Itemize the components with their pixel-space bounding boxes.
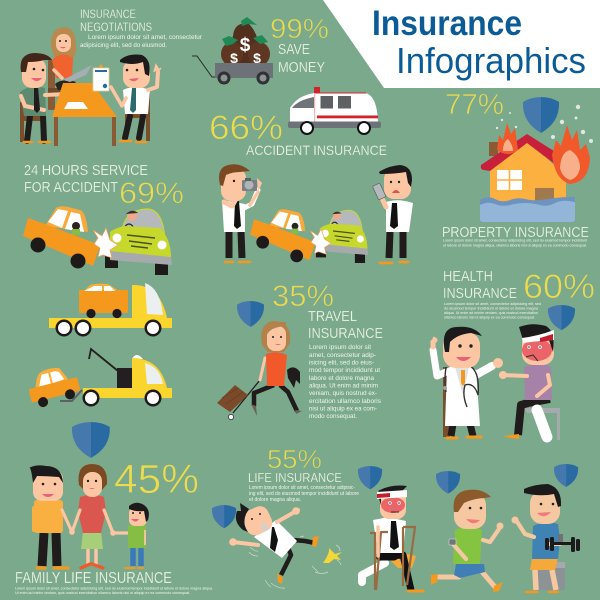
heading: insurance negotiations: Lorem ipsum dolor sit amet, consectetur — [88, 35, 202, 41]
illustration: family — [29, 464, 149, 568]
stat: 77%: 77% — [445, 89, 504, 121]
icon: shield travel — [237, 301, 264, 327]
stat: 66% accident insurance: ACCIDENT INSURANCE — [246, 142, 387, 158]
illustration: doctor — [433, 327, 503, 438]
illustration: man slipping on banana — [229, 503, 342, 588]
title banner: Insurance — [372, 4, 522, 43]
icon: money bags on cart: $ — [253, 50, 261, 66]
title banner: Infographics — [396, 40, 586, 81]
text block: travel lorem: ercitation ullamco laboris — [309, 398, 381, 405]
heading: health insurance 60%: Lorem ipsum dolor sit amet, consectetur adipisicing elit, sed — [444, 301, 541, 306]
illustration: flatbed tow truck — [49, 283, 172, 336]
icon: shield property — [523, 97, 559, 133]
illustration: house on fire in flood — [480, 105, 593, 222]
stat: 55% life insurance: LIFE INSURANCE — [248, 470, 342, 485]
heading: health insurance 60%: 60% — [523, 268, 595, 306]
title banner — [323, 0, 600, 88]
icon: ambulance — [288, 87, 381, 135]
icon: shield crutches — [358, 466, 382, 489]
heading: health insurance 60%: INSURANCE — [443, 285, 517, 302]
heading: insurance negotiations: NEGOTIATIONS — [80, 20, 152, 34]
stat: 55% life insurance: ing elit, sed do eiusmod tempor incididunt ut labore — [249, 491, 359, 497]
stat: 55% life insurance — [248, 444, 359, 503]
stat: 99% save money: MONEY — [278, 59, 325, 76]
stat: 99% save money: SAVE — [278, 41, 310, 58]
illustration: man on phone — [372, 165, 413, 263]
family life insurance heading: FAMILY LIFE INSURANCE — [15, 570, 172, 587]
icon: money bags on cart: $ — [240, 35, 251, 56]
heading: insurance negotiations: INSURANCE — [80, 7, 136, 21]
property insurance heading: ut labore et dolore magna aliqua. ullamco laboris nisi ut aliquip ex ea commodo consequat. — [443, 242, 587, 248]
family life insurance heading — [15, 570, 213, 595]
illustration: man lifting dumbbell — [512, 484, 580, 592]
illustration: negotiation table scene — [20, 27, 161, 146]
illustration: car crash — [23, 206, 172, 275]
stat: 35% travel insurance — [272, 280, 383, 342]
stat: 55% life insurance: et dolore magna aliqua. — [249, 497, 301, 503]
text block: travel lorem: amet, consectetur adip- — [309, 352, 376, 359]
stat: 45% family: 45% — [114, 456, 199, 502]
illustration: crane tow truck with car — [25, 349, 172, 410]
illustration: second car crash — [250, 209, 368, 263]
illustration: traveller with suitcase — [217, 321, 302, 420]
heading: 24 hours service: 69% — [119, 177, 184, 210]
icon: shield family — [72, 422, 110, 458]
stat: 99% save money: 99% — [270, 13, 329, 44]
stat: 35% travel insurance: TRAVEL — [308, 308, 357, 325]
heading: insurance negotiations — [80, 7, 202, 49]
text block: travel lorem: mod tempor incididunt ut — [309, 367, 380, 374]
stat: 55% life insurance: 55% — [267, 444, 322, 474]
stat: 35% travel insurance: INSURANCE — [308, 325, 383, 342]
heading: health insurance 60%: aliqua. Ut enim ad minim veniam, quis nostrud exercitation — [444, 310, 538, 315]
property insurance heading: Lorem ipsum dolor sit amet, consectetur adipisicing elit, sed do eiusmod tempor incididunt — [443, 238, 588, 242]
text block: travel lorem: aliqua. Ut enim ad minim — [309, 382, 378, 390]
text block: travel lorem: veniam, quis nostrud ex- — [309, 390, 377, 397]
heading: health insurance 60%: HEALTH — [443, 268, 493, 285]
icon: shield runner — [436, 471, 460, 494]
stat: 55% life insurance: Lorem ipsum dolor sit amet, consectetur adipisic- — [249, 485, 355, 491]
family life insurance heading: Ut enim ad minim veniam, quis nostrud exercitation ullamco laboris nisi ut aliquip ex ea commodo consequat. — [15, 590, 190, 595]
text block: travel lorem: Lorem ipsum dolor sit — [309, 344, 371, 351]
icon: money bags on cart — [192, 17, 273, 84]
icon: shield gym — [554, 464, 578, 487]
text block: travel lorem — [309, 344, 381, 420]
heading: health insurance 60% — [443, 268, 595, 320]
stat: 66% accident insurance: 66% — [209, 109, 283, 147]
text block: travel lorem: isicing elit, sed do eius- — [309, 360, 374, 366]
family life insurance heading: Lorem ipsum dolor sit amet, consectetur adipisicing elit, sed do eiusmod tempor incididunt ut labore et dolore magna aliqua. — [15, 586, 213, 590]
icon: shield fall — [212, 505, 236, 528]
heading: 24 hours service — [24, 162, 184, 210]
stat: 99% save money — [270, 13, 329, 76]
stat: 66% accident insurance — [209, 109, 387, 158]
heading: 24 hours service: 24 HOURS SERVICE — [24, 162, 148, 179]
illustration: man on crutches — [362, 486, 423, 591]
stat: 35% travel insurance: 35% — [272, 280, 334, 313]
text block: travel lorem: modo consequat. — [309, 413, 357, 420]
property insurance heading — [442, 224, 589, 248]
heading: insurance negotiations: adipisicing elit, sed do eiusmod. — [80, 43, 167, 49]
illustration: injured patient — [499, 324, 560, 440]
heading: health insurance 60%: do eiusmod tempor incididunt ut labore et dolore magna — [444, 306, 539, 310]
text block: travel lorem: labore et dolore magna — [309, 375, 374, 382]
heading: 24 hours service: FOR ACCIDENT — [24, 179, 118, 196]
text block: travel lorem: nisi ut aliquip ex ea com- — [309, 406, 377, 412]
illustration: photographer — [219, 164, 262, 262]
icon: shield health — [548, 305, 575, 330]
icon: money bags on cart: $ — [230, 50, 238, 66]
heading: health insurance 60%: ullamco laboris nisi ut aliquip ex ea commodo consequat. — [444, 314, 535, 320]
illustration: runner — [431, 490, 504, 592]
